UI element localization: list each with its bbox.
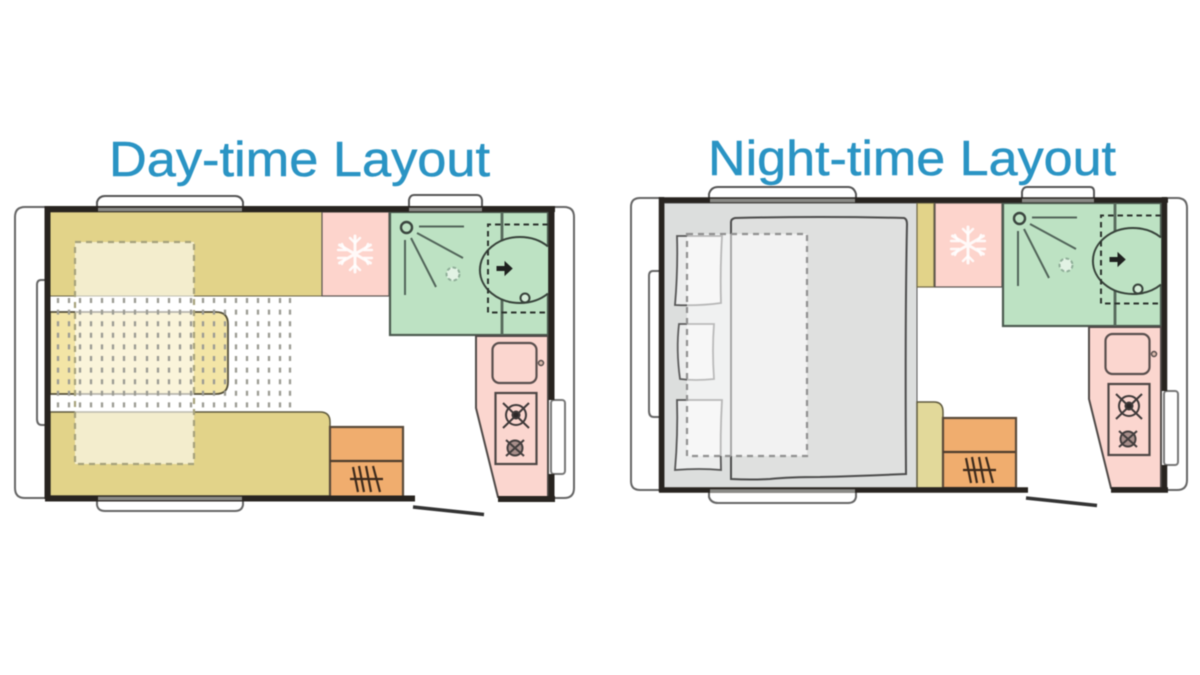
icon: large burner [503, 403, 529, 428]
panel: day-time floor plan [15, 195, 574, 514]
door [413, 507, 484, 514]
side window [551, 400, 565, 474]
shower head and spray lines [1014, 213, 1077, 286]
bottom bench [50, 412, 330, 496]
shower drain [1060, 258, 1072, 272]
top window [97, 196, 243, 209]
bench strip top [917, 203, 934, 287]
window sills [710, 200, 1094, 491]
bed left edge seen through [730, 234, 732, 456]
title: day-time layout: Day-time Layout [109, 133, 490, 187]
fridge [935, 203, 1002, 287]
pillow one [675, 236, 722, 305]
kitchen unit [476, 336, 548, 497]
pillow two [678, 324, 714, 380]
bench strip bottom [917, 402, 943, 488]
left window [649, 271, 659, 417]
sleeping area base [664, 203, 917, 488]
walls [659, 197, 1168, 492]
door [1026, 498, 1097, 506]
top right window [1022, 187, 1094, 200]
pull-out bed outline [687, 234, 807, 456]
dashed basin outline [488, 224, 548, 312]
partition [1114, 203, 1116, 326]
pillow three [675, 400, 722, 470]
washroom [1003, 203, 1161, 326]
icon: small burner [1119, 431, 1137, 447]
walls [45, 206, 555, 500]
shower drain [446, 268, 460, 280]
hob [496, 393, 536, 464]
sink [1106, 334, 1150, 374]
panel: night-time floor plan [631, 187, 1187, 506]
toilet [480, 237, 548, 303]
icon: snowflake [338, 236, 372, 272]
icon: large burner [1116, 394, 1142, 419]
title: night-time layout: Night-time Layout [708, 132, 1116, 186]
dotted aisle pattern [58, 298, 290, 410]
left window [37, 280, 46, 425]
table [50, 312, 228, 394]
outer shell right [555, 207, 574, 498]
sink tap [1152, 352, 1156, 356]
outer shell left [15, 207, 45, 498]
kitchen unit [1089, 327, 1161, 488]
partition [501, 212, 503, 335]
sink tap [538, 360, 544, 366]
top window [709, 187, 856, 200]
top right window [409, 195, 482, 209]
wardrobe cabinet [330, 427, 403, 497]
icon: hangers [963, 457, 996, 483]
sink [492, 343, 536, 383]
bottom window [97, 498, 243, 511]
washroom [390, 212, 548, 335]
outer shell right [1168, 198, 1187, 490]
bed [731, 217, 907, 480]
icon: arrow [497, 262, 512, 275]
icon: small burner [506, 440, 524, 456]
side window [1164, 391, 1178, 465]
wardrobe cabinet [943, 418, 1016, 488]
icon: arrow [1110, 253, 1125, 266]
outer shell left [631, 198, 659, 490]
icon: snowflake [951, 227, 985, 263]
toilet [1093, 228, 1161, 294]
window sills [98, 210, 482, 498]
fridge [322, 212, 389, 296]
pull-out bed outline [75, 242, 194, 464]
dashed basin outline [1101, 216, 1161, 304]
hob [1108, 384, 1150, 455]
top bench [50, 212, 322, 296]
icon: hangers [350, 466, 383, 492]
shower head and spray lines [401, 222, 464, 295]
bottom window [709, 490, 856, 503]
